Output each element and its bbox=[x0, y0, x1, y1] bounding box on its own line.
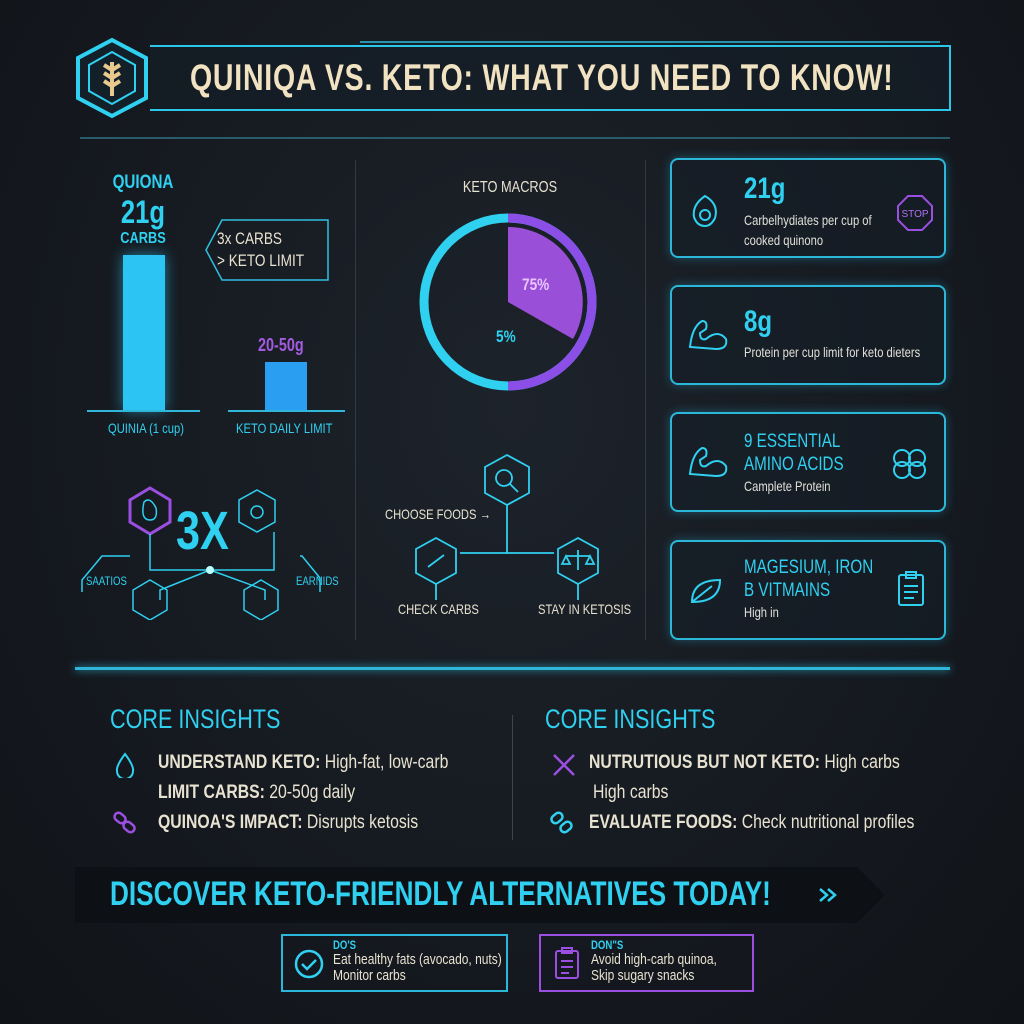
bar chart: quinoa vs keto: CARBS bbox=[120, 230, 166, 247]
card: minerals: High in bbox=[744, 604, 779, 620]
card: amino acids bbox=[670, 412, 946, 512]
core insights left: UNDERSTAND KETO: High-fat, low-carb bbox=[158, 752, 448, 773]
3x diagram: SAATIOS bbox=[86, 574, 127, 588]
do's box: DO'S bbox=[333, 938, 356, 952]
3x diagram: 3X bbox=[176, 501, 229, 561]
flow: choose, check, stay bbox=[385, 454, 631, 617]
card: amino acids: 9 ESSENTIAL bbox=[744, 431, 840, 452]
core insights right bbox=[545, 704, 914, 834]
card: 21g carbs: 21g bbox=[744, 172, 785, 205]
do's box: Eat healthy fats (avocado, nuts) bbox=[333, 951, 502, 968]
core insights right: CORE INSIGHTS bbox=[545, 704, 715, 734]
3x diagram bbox=[81, 486, 339, 620]
card: 21g carbs bbox=[670, 158, 946, 258]
3x diagram: EARNIDS bbox=[296, 574, 339, 588]
donut chart: keto macros: 75% bbox=[522, 275, 549, 294]
card: amino acids: AMINO ACIDS bbox=[744, 454, 844, 475]
don'ts box bbox=[539, 934, 754, 992]
card: 8g protein: Protein per cup limit for keto dieters bbox=[744, 344, 920, 360]
bar chart: quinoa vs keto: QUIONA bbox=[113, 172, 173, 193]
card: minerals: MAGESIUM, IRON bbox=[744, 557, 873, 578]
flow: choose, check, stay: CHECK CARBS bbox=[398, 601, 479, 617]
do's box bbox=[281, 934, 508, 992]
CTA banner: DISCOVER KETO-FRIENDLY ALTERNATIVES TODAY! bbox=[110, 875, 771, 913]
core insights left: CORE INSIGHTS bbox=[110, 704, 280, 734]
do's box: Monitor carbs bbox=[333, 967, 406, 984]
bar chart: quinoa vs keto: > KETO LIMIT bbox=[217, 251, 304, 270]
core insights left: QUINOA'S IMPACT: Disrupts ketosis bbox=[158, 812, 418, 833]
bar chart: quinoa vs keto: QUINIA (1 cup) bbox=[108, 420, 184, 436]
card: minerals: B VITMAINS bbox=[744, 580, 830, 601]
core insights right: NUTRUTIOUS BUT NOT KETO: High carbs bbox=[589, 752, 900, 773]
bar chart: quinoa vs keto bbox=[87, 172, 345, 436]
donut chart: keto macros: KETO MACROS bbox=[463, 179, 557, 196]
don'ts box: Skip sugary snacks bbox=[591, 967, 694, 984]
flow: choose, check, stay: CHOOSE FOODS → bbox=[385, 506, 491, 522]
header banner bbox=[76, 38, 951, 118]
don'ts box: DON"S bbox=[591, 938, 623, 952]
card: 21g carbs: Carbelhydiates per cup of bbox=[744, 212, 872, 228]
card: amino acids: Camplete Protein bbox=[744, 478, 831, 494]
title: QUINIQA VS. KETO: WHAT YOU NEED TO KNOW! bbox=[190, 57, 894, 98]
donut chart: keto macros: 5% bbox=[496, 327, 516, 346]
flow: choose, check, stay: STAY IN KETOSIS bbox=[538, 601, 631, 617]
bar chart: quinoa vs keto: KETO DAILY LIMIT bbox=[236, 420, 332, 436]
bar chart: quinoa vs keto: 3x CARBS bbox=[217, 229, 282, 248]
bar chart: quinoa vs keto: 20-50g bbox=[258, 335, 304, 355]
bar chart: quinoa vs keto: 21g bbox=[121, 194, 165, 230]
card: minerals bbox=[670, 540, 946, 640]
core insights left: LIMIT CARBS: 20-50g daily bbox=[158, 782, 355, 803]
card: 21g carbs: cooked quinono bbox=[744, 232, 823, 248]
core insights left bbox=[110, 704, 448, 834]
card: 8g protein bbox=[670, 285, 946, 385]
core insights right: High carbs bbox=[593, 782, 668, 803]
CTA banner bbox=[110, 867, 842, 923]
core insights right: EVALUATE FOODS: Check nutritional profiles bbox=[589, 812, 914, 833]
donut chart: keto macros bbox=[420, 179, 596, 390]
card: 21g carbs: STOP bbox=[901, 209, 929, 220]
card: 8g protein: 8g bbox=[744, 305, 772, 338]
don'ts box: Avoid high-carb quinoa, bbox=[591, 951, 717, 968]
callout bbox=[205, 219, 329, 281]
